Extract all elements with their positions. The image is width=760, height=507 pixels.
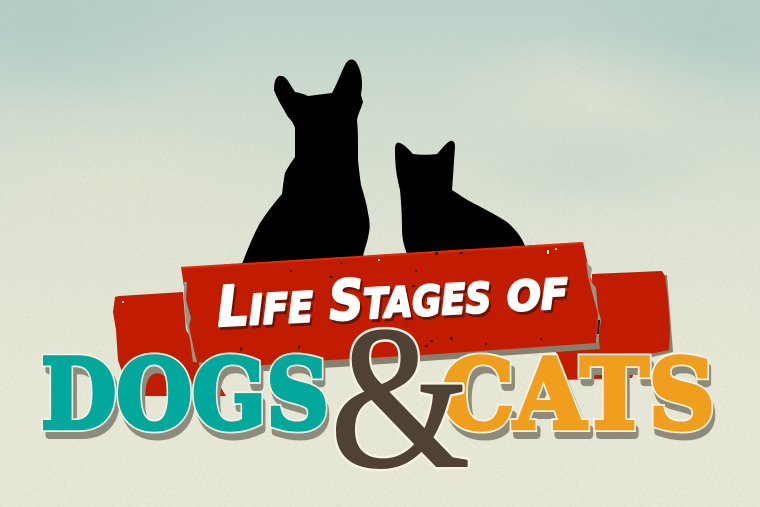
heading: ampersand: & xyxy=(330,285,470,507)
heading: DOGS: DOGS xyxy=(45,345,331,458)
icon: dog silhouette xyxy=(242,59,370,264)
panel: back red banner right xyxy=(556,271,673,380)
icon: cat silhouette xyxy=(395,141,525,254)
heading: ampersand: & xyxy=(330,285,470,507)
heading text xyxy=(215,257,569,339)
heading shadow: LIFE xyxy=(218,273,317,342)
heading: CATS: CATS xyxy=(445,345,717,458)
heading: CATS: CATS xyxy=(441,338,715,451)
panel: main banner shadow xyxy=(190,300,600,372)
specks xyxy=(240,252,542,351)
heading: CATS: CATS xyxy=(441,338,715,451)
panel: main red banner xyxy=(122,242,601,366)
heading text: LIFE xyxy=(215,270,315,339)
heading text: STAGES xyxy=(327,261,492,333)
heading: DOGS: DOGS xyxy=(41,338,329,451)
heading shadow: OF xyxy=(508,273,571,324)
torn edge left xyxy=(184,282,197,362)
torn edge right xyxy=(586,262,601,342)
heading: DOGS: DOGS xyxy=(41,338,329,451)
heading shadow: STAGES xyxy=(329,264,495,336)
heading text: OF xyxy=(506,270,569,321)
heading: Life Stages of xyxy=(215,257,571,342)
panel: back red banner left xyxy=(113,292,226,396)
heading shadow xyxy=(218,260,571,342)
